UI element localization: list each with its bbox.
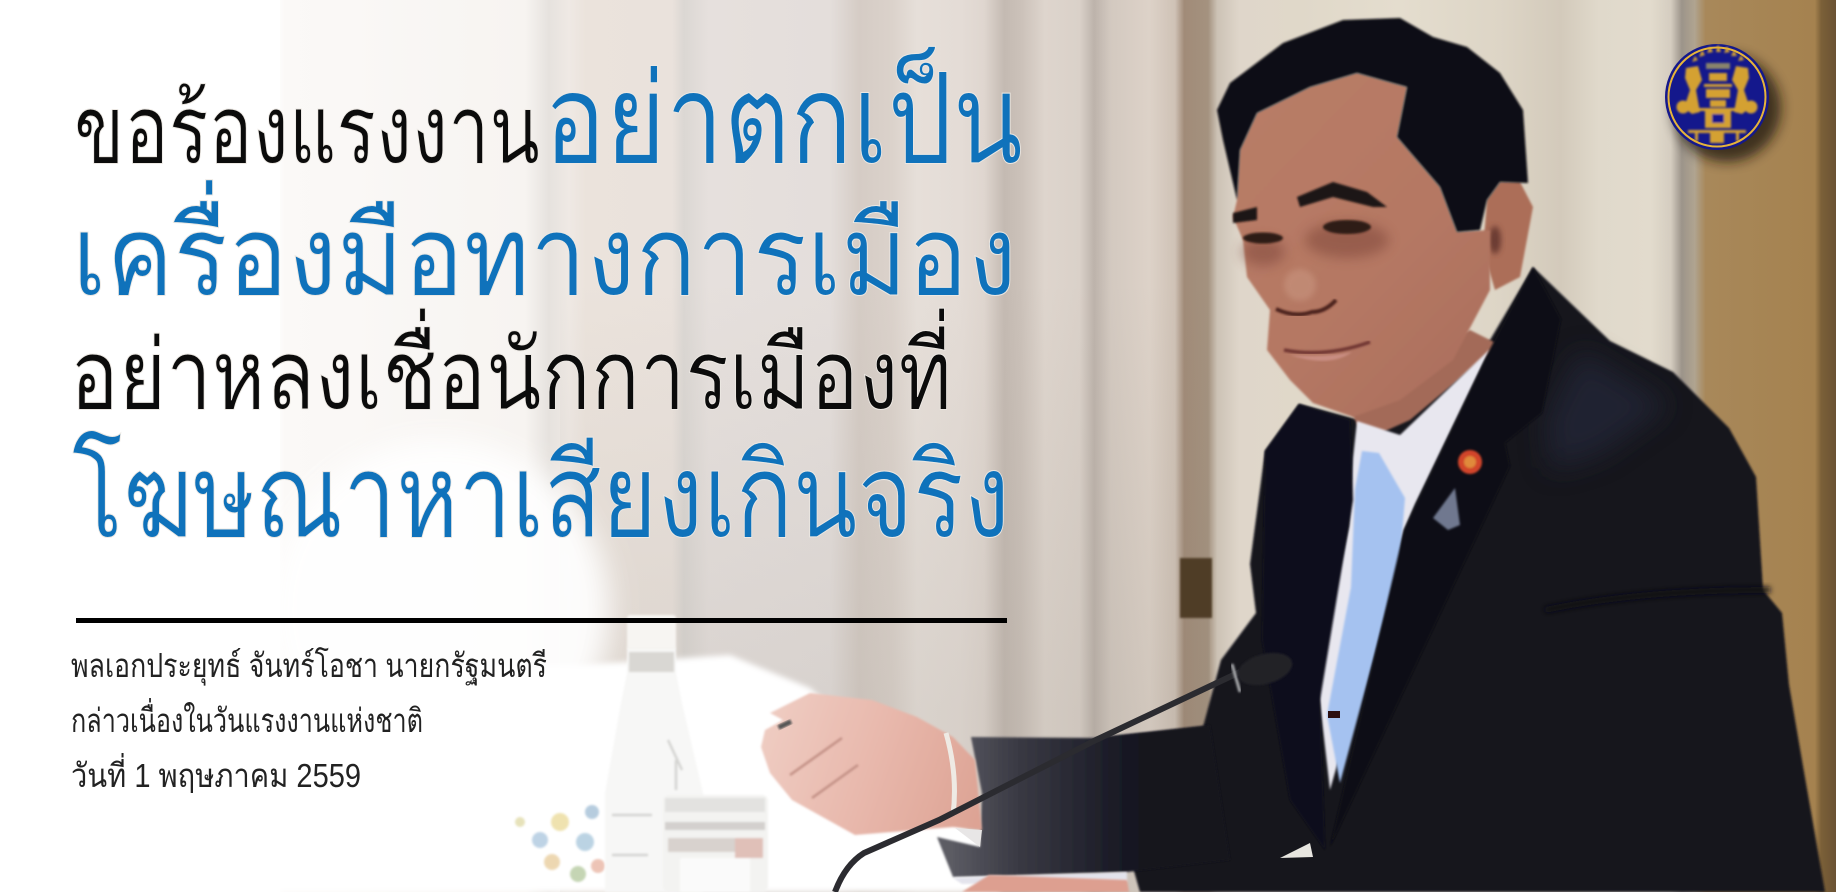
finger creases (790, 738, 858, 798)
ear inner (1489, 226, 1501, 254)
lower hand (962, 875, 1129, 892)
nose highlight (1284, 269, 1316, 301)
occasion: กล่าวเนื่องในวันแรงงานแห่งชาติ (71, 698, 423, 739)
bottle label marks (612, 740, 682, 855)
nostrils (1276, 300, 1336, 314)
attribution text (71, 647, 547, 794)
top flames (1692, 44, 1744, 62)
headline line 1: ขอร้องแรงงาน (74, 77, 540, 184)
bracelet (946, 733, 954, 815)
right lapel (1330, 267, 1561, 847)
seal shadow (1673, 54, 1781, 162)
bottom band (1688, 130, 1746, 143)
left lion (1684, 66, 1702, 114)
hand (761, 693, 982, 835)
headline (70, 46, 1023, 563)
sleeve crease (1545, 590, 1770, 610)
headline line 2: เครื่องมือทางการเมือง (72, 179, 1017, 319)
white table and fade (0, 0, 1000, 892)
table-top objects (515, 615, 768, 892)
face (1233, 73, 1490, 417)
shirt hem glimpse (1280, 843, 1313, 858)
seal disc (1665, 44, 1769, 150)
left eye (1243, 232, 1283, 244)
base (1698, 108, 1736, 128)
headline line 3: อย่าหลงเชื่อนักการเมืองที่ (70, 308, 952, 430)
mouth (1284, 342, 1370, 353)
wall bracket (1180, 558, 1212, 618)
lower lip (1290, 352, 1352, 361)
seal emblem (1676, 44, 1758, 143)
eye shadow (1241, 222, 1389, 266)
left lapel (1262, 404, 1353, 850)
date: วันที่ 1 พฤษภาคม 2559 (71, 753, 361, 794)
tie bar (1328, 711, 1340, 718)
drinking glass (663, 795, 768, 892)
shoulder highlight (1545, 350, 1670, 470)
neck (1340, 330, 1500, 440)
held pen (777, 719, 792, 730)
ear (1483, 182, 1533, 290)
government seal (1665, 44, 1781, 162)
jacket (1096, 267, 1825, 892)
bottle cap (627, 615, 676, 649)
lapel pin red (1458, 450, 1482, 474)
shirt cuff (955, 828, 982, 847)
headline line 1 accent: อย่าตกเป็น (544, 46, 1023, 190)
lower cuff strip (953, 872, 1127, 884)
microphone head (1234, 647, 1296, 691)
divider rule (76, 618, 1007, 623)
forearm sleeve (937, 725, 1230, 877)
left eyebrow (1233, 207, 1257, 223)
water bottle (605, 647, 703, 892)
seal ring (1668, 48, 1766, 146)
speaker name: พลเอกประยุทธ์ จันทร์โอชา นายกรัฐมนตรี (71, 647, 547, 686)
hair (1217, 18, 1528, 232)
pedestal tiers (1706, 63, 1730, 69)
sweets bowl (515, 805, 605, 882)
person: prime minister (761, 18, 1825, 892)
microphone clip (1232, 664, 1240, 692)
bottle neck (629, 652, 674, 672)
lapel pin silver (1433, 488, 1460, 530)
headline line 4: โฆษณาหาเสียงเกินจริง (72, 431, 1010, 563)
right eye (1323, 220, 1371, 234)
tie (1327, 451, 1405, 783)
right lion (1732, 66, 1750, 114)
microphone stem (835, 672, 1240, 892)
shirt (1317, 349, 1490, 790)
right eyebrow (1297, 182, 1387, 207)
